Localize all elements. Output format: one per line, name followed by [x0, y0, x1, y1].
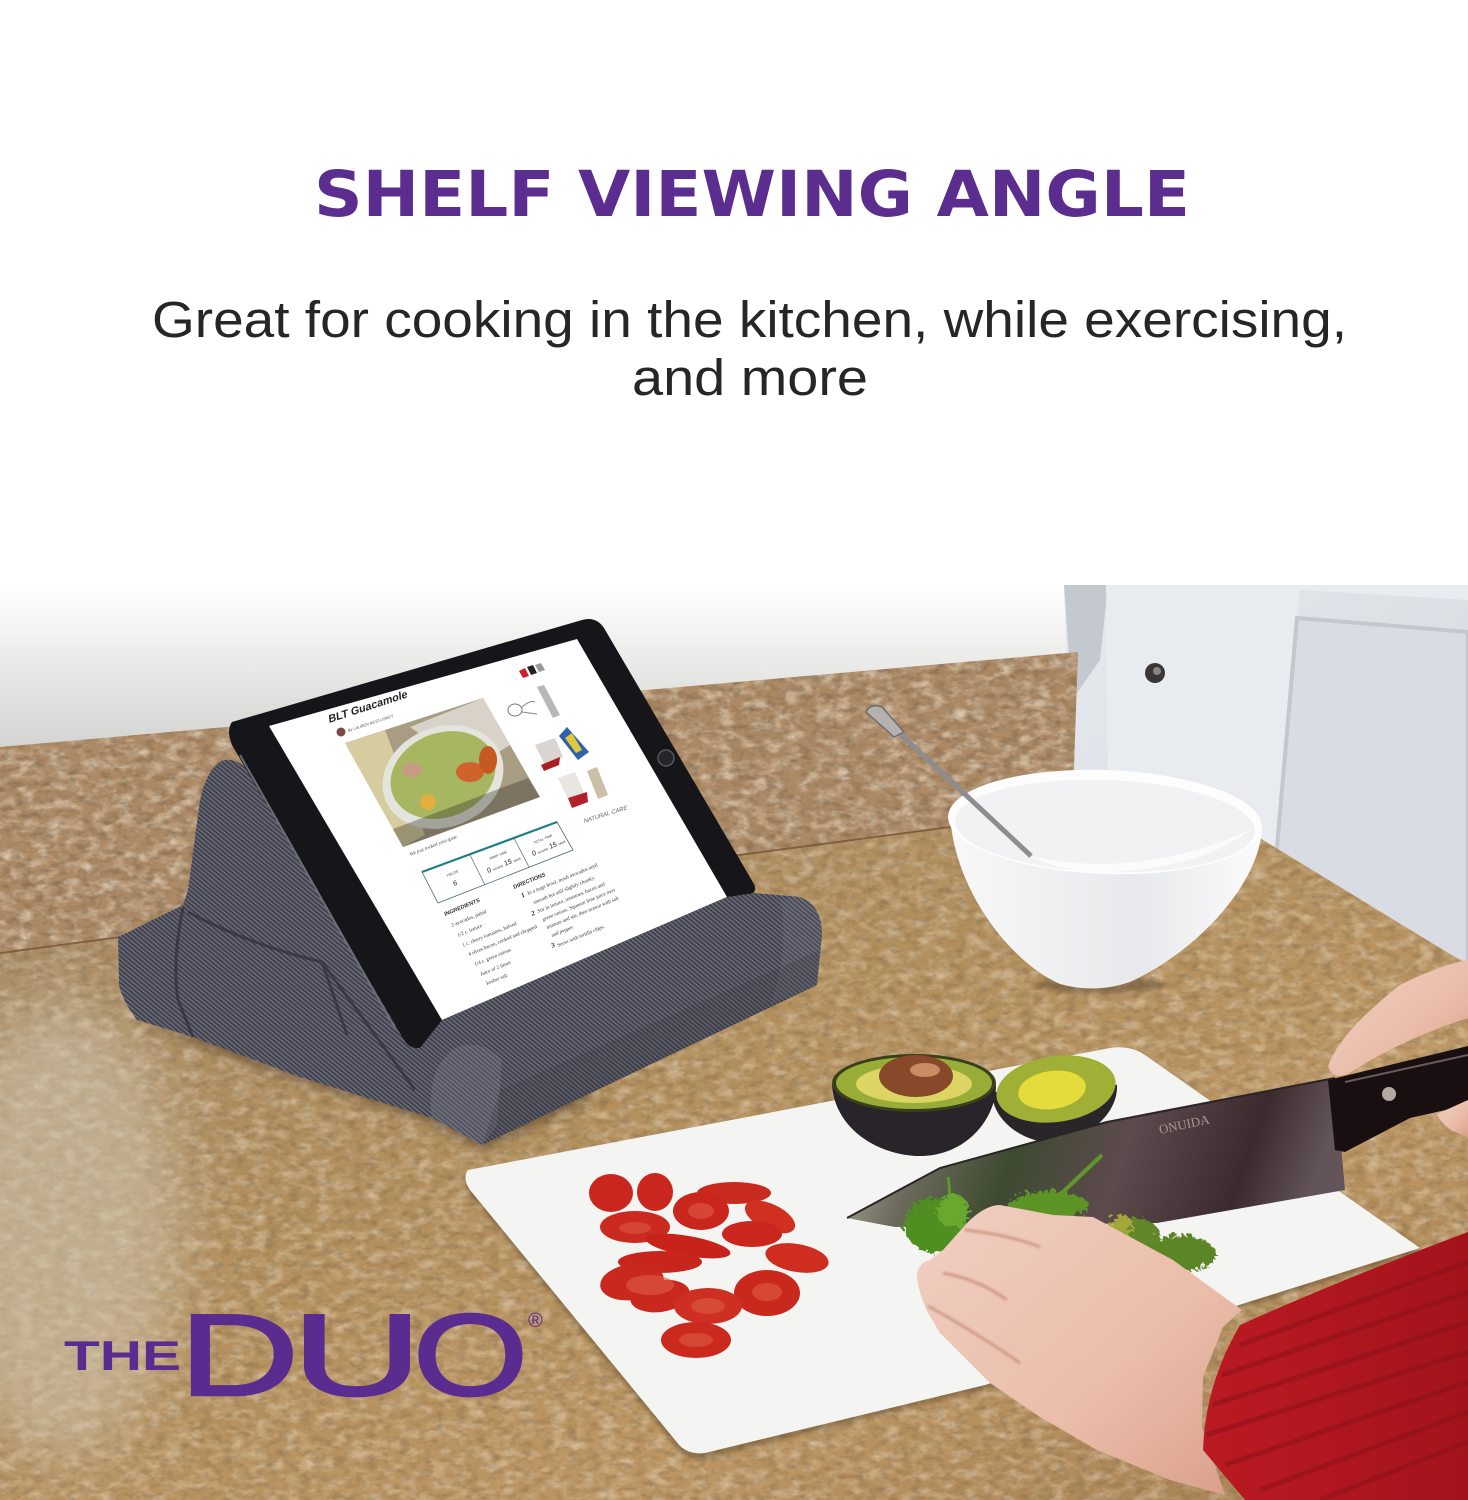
- knife handle: [1328, 1046, 1468, 1152]
- spoon: [866, 706, 1031, 856]
- directions list: Stir in lettuce, tomatoes, bacon and: [537, 881, 606, 915]
- avocado left half: [832, 1054, 996, 1156]
- pillow back body: [118, 760, 600, 1150]
- pillow front base: [420, 893, 822, 1146]
- home button: [658, 750, 674, 766]
- ingredients list: kosher salt: [486, 972, 509, 987]
- directions list: Serve with tortilla chips.: [557, 924, 605, 949]
- cherry tomatoes: [589, 1173, 831, 1358]
- chef knife: ONUIDA: [1158, 1111, 1211, 1137]
- ingredients list: [444, 898, 538, 987]
- logo: The Duo: U: [292, 1290, 422, 1420]
- sidebar products: [508, 663, 627, 825]
- recipe info table: [422, 822, 573, 903]
- recipe intro line: We just rocked your guac.: [409, 834, 459, 858]
- sidebar products: NATURAL CARE: [584, 805, 627, 825]
- directions list: green onions. Squeeze lime juice over: [542, 887, 616, 923]
- tablet screen: [269, 639, 727, 1020]
- logo: The Duo: O: [413, 1290, 528, 1420]
- lower hand: [917, 1205, 1242, 1495]
- ingredients list: 1/4 c. green onions: [474, 947, 512, 968]
- recipe video: [345, 698, 540, 847]
- chef knife: [847, 1046, 1468, 1227]
- ingredients list: 1 c. cherry tomatoes, halved: [462, 921, 518, 949]
- subtitle: Great for cooking in the kitchen, while exercising,: [152, 291, 1347, 348]
- subtitle: [152, 291, 1347, 406]
- recipe info table: TOTAL TIME: [533, 833, 553, 845]
- recipe byline: By LAUREN MCCLUSKEY: [348, 713, 394, 733]
- granite backsplash: [0, 645, 1080, 955]
- pillow seams and pocket: [176, 908, 415, 1090]
- subtitle: and more: [632, 349, 868, 406]
- recipe info table: 6: [452, 880, 458, 888]
- directions list: mixture and stir, then season with salt: [546, 895, 620, 931]
- white bowl: [946, 765, 1264, 993]
- ingredients list: 4 slices bacon, cooked and chopped: [468, 924, 538, 958]
- avocado right half: [994, 1055, 1118, 1140]
- recipe info table: PREP TIME: [489, 850, 508, 861]
- directions list: smooth but still slightly chunky.: [533, 875, 596, 906]
- photo: kitchen scene: [0, 585, 1468, 1500]
- ingredients list: 1/2 c. lettuce: [457, 923, 484, 939]
- title: SHELF VIEWING ANGLE: [314, 158, 1190, 231]
- directions list: and pepper.: [551, 924, 575, 939]
- recipe info table: YIELDS: [446, 869, 459, 878]
- directions list: In a large bowl, mash avocados until: [527, 862, 599, 897]
- logo: The Duo: THE: [64, 1332, 181, 1379]
- parsley: [901, 1155, 1212, 1268]
- directions list: [513, 862, 620, 950]
- upper hand fingers: [1328, 960, 1468, 1136]
- directions list: 2: [530, 909, 536, 918]
- granite counter top: [0, 820, 1468, 1500]
- recipe info table: 0 HOURS 15 MINS: [486, 855, 522, 875]
- recipe byline: [336, 713, 394, 736]
- wall: [0, 613, 1066, 747]
- ingredients list: Juice of 2 limes: [479, 959, 512, 978]
- logo: The Duo: D: [179, 1290, 299, 1420]
- red sweater sleeve: [1203, 1232, 1468, 1500]
- recipe title: BLT Guacamole: [328, 688, 408, 726]
- recipe info table: 0 HOURS 15 MINS: [531, 838, 567, 858]
- cutting board: [465, 1047, 1420, 1459]
- logo: The Duo: ®: [528, 1310, 543, 1332]
- ingredients list: 2 avocados, pitted: [451, 909, 488, 929]
- tablet: [229, 619, 755, 1048]
- directions list: DIRECTIONS: [513, 872, 547, 891]
- ingredients list: INGREDIENTS: [444, 898, 481, 918]
- directions list: 3: [550, 941, 556, 950]
- directions list: 1: [520, 891, 526, 900]
- logo: The Duo: [64, 1290, 543, 1420]
- cabinet door: [1064, 585, 1468, 980]
